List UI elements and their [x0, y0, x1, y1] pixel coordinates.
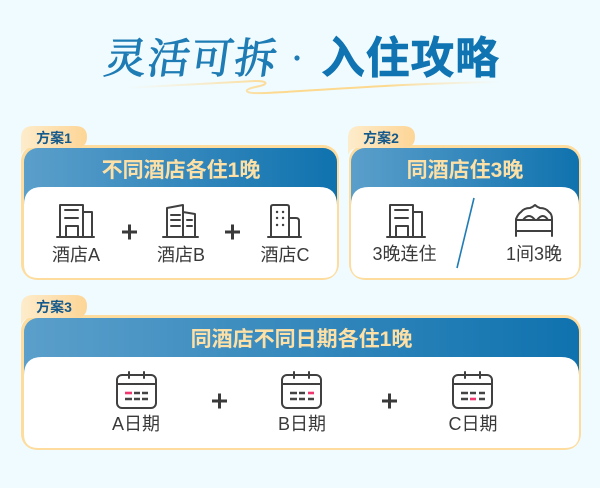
tab: plan 2: 方案2: [363, 130, 399, 146]
label: 3 nights in a row: 3晚连住: [372, 244, 437, 264]
icon: calendar A: [117, 372, 156, 408]
tab: plan 3: 方案3: [36, 299, 72, 315]
label: date B: B日期: [278, 414, 326, 434]
label: date C: C日期: [448, 414, 498, 434]
plus 4: [382, 394, 397, 408]
title underline swoosh: [125, 81, 500, 93]
panel: plan 3: [21, 295, 581, 450]
tab: plan 1: [21, 126, 87, 155]
plus 2: [225, 224, 240, 240]
heading: plan 2: 同酒店住3晚: [407, 159, 523, 182]
label: hotel A: 酒店A: [52, 245, 100, 265]
panel: plan 2: [348, 126, 581, 280]
icon: bed: [516, 205, 552, 236]
icon: hotel A: [57, 205, 94, 237]
label: 1 room 3 nights: 1间3晚: [506, 244, 562, 264]
icon: hotel B: [163, 205, 198, 237]
tab: plan 2: [348, 126, 415, 155]
title: [101, 34, 500, 93]
label: hotel B: 酒店B: [157, 245, 205, 265]
icon: calendar C: [453, 372, 492, 408]
icon: hotel 3 nights: [387, 205, 425, 237]
label: date A: A日期: [112, 414, 160, 434]
label: hotel C: 酒店C: [260, 245, 310, 265]
title: bold part: 入住攻略: [321, 34, 499, 83]
heading: plan 3: 同酒店不同日期各住1晚: [191, 327, 412, 351]
plus 3: [212, 394, 227, 408]
tab: plan 3: [21, 295, 87, 325]
title: calligraphy part: 灵活可拆: [101, 36, 280, 83]
icon: hotel C: [268, 205, 301, 237]
title: separator dot: [294, 55, 300, 61]
plus 1: [122, 224, 137, 240]
heading: plan 1: 不同酒店各住1晚: [102, 158, 260, 182]
panel: plan 1: [21, 126, 339, 280]
divider slash: [457, 198, 474, 268]
tab: plan 1: 方案1: [36, 130, 72, 146]
icon: calendar B: [282, 372, 321, 408]
